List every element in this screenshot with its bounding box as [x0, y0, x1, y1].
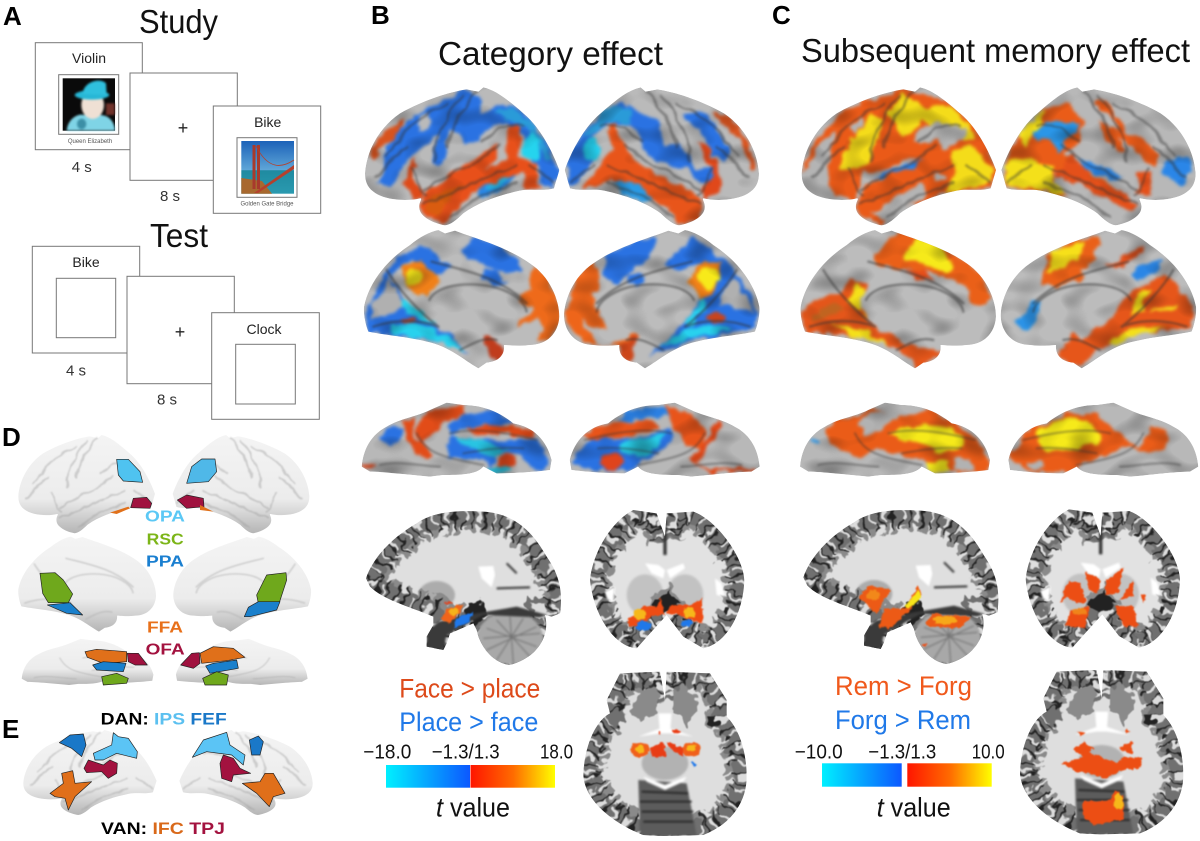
colour bar tick labels: 18.0 — [540, 741, 573, 763]
panel C: cortical surface maps — [790, 70, 1200, 503]
study label: 4 s: 4 s — [72, 159, 92, 176]
colour bar — [386, 765, 555, 788]
brain: left lateral, category — [365, 88, 560, 226]
heading: Subsequent memory effect: Subsequent memory effect — [801, 32, 1190, 69]
brain: right lateral, memory — [1002, 88, 1196, 226]
panel E: attention networks — [23, 730, 313, 815]
colour bar tick labels: −1.3/1.3 — [868, 741, 936, 763]
region labels, panel D: FFA — [147, 619, 183, 636]
label: Place > face: Place > face — [399, 707, 538, 737]
colour bar tick labels: −1.3/1.3 — [432, 741, 500, 763]
study trial screen: Violin: Queen Elizabeth — [68, 139, 112, 145]
brain: left medial, memory — [800, 230, 996, 368]
axis label: t value: t value — [436, 793, 510, 823]
brain: left lateral, memory — [802, 88, 996, 226]
label: Forg > Rem: Forg > Rem — [835, 705, 971, 735]
panel C label: C — [772, 0, 791, 30]
region labels, panel D — [145, 509, 185, 658]
brain: left lateral, networks — [23, 730, 157, 815]
axial slice, category — [583, 672, 747, 836]
test trial screen: Clock: Clock — [246, 321, 282, 337]
test fixation screen: + — [175, 322, 185, 342]
panel C: volume slices — [803, 509, 1183, 834]
brain: right medial, memory — [1000, 230, 1196, 368]
study trial screen: Bike — [213, 106, 321, 213]
sagittal slice, category — [366, 511, 561, 665]
panel B: volume slices — [366, 510, 747, 836]
brain: right medial, category — [564, 230, 760, 368]
study trial screen: Bike: Golden Gate Bridge — [240, 202, 294, 208]
photo: Queen Elizabeth — [63, 78, 115, 131]
colour bar tick labels: 10.0 — [972, 741, 1005, 763]
panel B: cortical surface maps — [350, 70, 783, 503]
coronal slice, category — [590, 510, 744, 648]
panel label B: B — [371, 0, 390, 30]
brain: left ventral, regions — [22, 639, 153, 685]
sagittal slice, memory — [803, 510, 998, 664]
panel label E: E — [2, 714, 19, 744]
photo: Golden Gate Bridge — [241, 141, 294, 194]
region labels, panel D: OPA — [145, 509, 185, 526]
brain: left lateral, regions — [18, 435, 155, 533]
legend: category effect — [363, 673, 573, 823]
region labels, panel D: RSC — [147, 531, 184, 548]
study trial screen: Violin — [35, 43, 142, 150]
brain: left medial, category — [364, 230, 560, 368]
axial slice, memory — [1020, 670, 1183, 834]
heading: Study: Study — [139, 3, 218, 40]
label: DAN: DAN: IPS FEF — [101, 709, 227, 728]
study trial screen: Bike: Bike — [254, 114, 282, 130]
region labels, panel D: OFA — [146, 641, 185, 658]
label: Rem > Forg: Rem > Forg — [835, 671, 972, 701]
test trial screen: Bike: Bike — [72, 254, 100, 270]
label: Face > place: Face > place — [399, 673, 540, 703]
brain: right ventral, category — [570, 402, 760, 476]
study fixation screen — [130, 73, 237, 180]
study label: 8 s: 8 s — [160, 188, 180, 205]
brain: right lateral, networks — [179, 730, 313, 815]
test fixation screen — [127, 276, 234, 384]
test trial screen: Bike — [32, 246, 140, 353]
colour bar tick labels — [795, 741, 1005, 763]
test label: 4 s: 4 s — [66, 363, 86, 380]
test label: 8 s: 8 s — [157, 392, 177, 409]
brain: left medial, regions — [18, 537, 156, 632]
panel label A: A — [3, 1, 22, 31]
brain: right ventral, regions — [176, 639, 308, 685]
colour bar tick labels — [363, 741, 573, 763]
label: VAN: VAN: IFC TPJ — [101, 819, 225, 838]
brain: right lateral, regions — [173, 435, 309, 533]
panel D: scene and face regions — [18, 435, 311, 685]
heading: Category effect: Category effect — [438, 35, 663, 72]
legend: memory effect — [795, 671, 1005, 823]
brain: left ventral, category — [362, 402, 552, 476]
brain: right lateral, category — [564, 88, 759, 226]
brain: left ventral, memory — [800, 402, 990, 476]
panel label D: D — [2, 422, 21, 452]
colour bar tick labels: −18.0 — [363, 741, 411, 763]
heading: Test: Test — [150, 217, 208, 254]
test trial screen: Clock — [212, 313, 319, 419]
coronal slice, memory — [1026, 509, 1180, 648]
brain: right medial, regions — [173, 537, 311, 632]
brain: right ventral, memory — [1008, 402, 1198, 476]
colour bar tick labels: −10.0 — [795, 741, 843, 763]
panel A: study and test timeline — [32, 3, 321, 419]
study trial screen: Violin: Violin — [72, 50, 106, 66]
colour bar — [822, 763, 992, 787]
axis label: t value: t value — [877, 793, 951, 823]
study fixation screen: + — [178, 118, 188, 138]
region labels, panel D: PPA — [146, 554, 184, 571]
